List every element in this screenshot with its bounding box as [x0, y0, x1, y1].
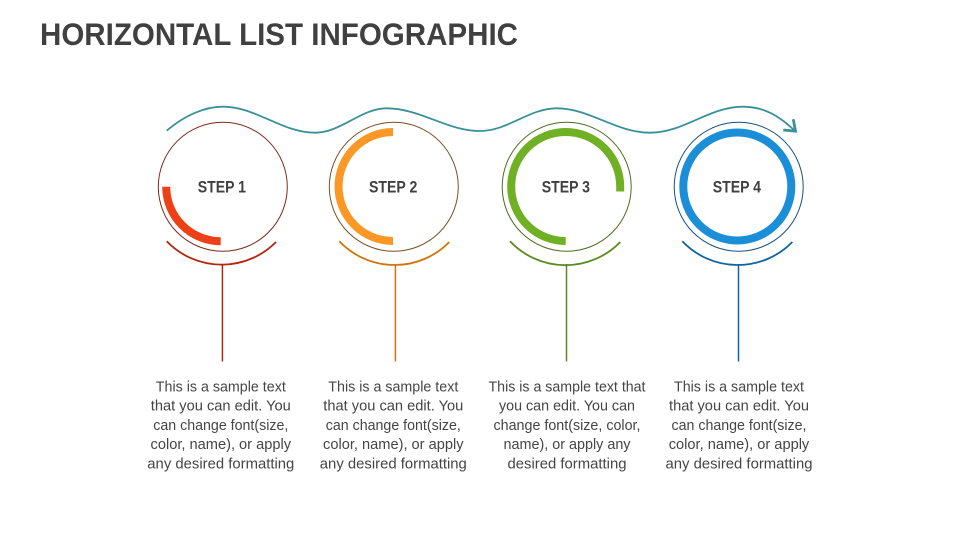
panel: step 4	[666, 122, 812, 472]
step 4 lower arc	[682, 241, 792, 265]
step 4 label: STEP 4	[713, 178, 761, 197]
step 2 text	[320, 380, 467, 472]
step 3 text: change font(size, color,	[494, 418, 640, 434]
step 3 text: desired formatting	[508, 456, 626, 472]
step 2 text: can change font(size,	[326, 418, 461, 434]
step 4 text: can change font(size,	[672, 418, 806, 434]
title: HORIZONTAL LIST INFOGRAPHIC	[40, 16, 518, 52]
step 3 lower arc	[510, 241, 620, 265]
step 1 text: This is a sample text	[156, 380, 286, 396]
icon: step 4 outer circle	[674, 122, 803, 251]
step 1 text	[147, 380, 294, 472]
step 1 text: can change font(size,	[153, 418, 288, 434]
step 3 text: name), or apply any	[504, 437, 631, 453]
step 3 text: This is a sample text that	[488, 380, 646, 396]
panel: step 3	[488, 122, 646, 472]
step 3 text	[488, 380, 646, 472]
panel: step 1	[147, 122, 294, 472]
step 2 text: that you can edit. You	[323, 398, 463, 414]
step 3 text: you can edit. You can	[499, 398, 635, 414]
step 1 stem	[221, 264, 223, 362]
panel: step 2	[320, 122, 467, 472]
icon: step 2 outer circle	[329, 122, 458, 251]
step 3 stem	[566, 264, 568, 362]
arrow: wavy connector	[167, 107, 795, 133]
step 2 stem	[394, 264, 396, 362]
icon: step 3 outer circle	[502, 122, 631, 251]
step 4 text: that you can edit. You	[669, 398, 809, 414]
icon: step 3 progress arc	[511, 132, 620, 241]
step 1 text: that you can edit. You	[151, 398, 291, 414]
step 4 text: This is a sample text	[674, 380, 804, 396]
step 4 text	[666, 380, 812, 472]
step 2 text: This is a sample text	[328, 380, 458, 396]
step 1 lower arc	[167, 241, 276, 265]
step 2 label: STEP 2	[369, 178, 417, 197]
step 1 text: any desired formatting	[147, 456, 294, 472]
step 1 text: color, name), or apply	[151, 437, 292, 453]
icon: step 1 progress arc	[166, 187, 221, 241]
step 1 label: STEP 1	[198, 178, 246, 197]
icon: step 2 progress arc	[339, 132, 393, 241]
icon: step 4 progress ring	[683, 132, 791, 240]
step 4 text: color, name), or apply	[669, 437, 810, 453]
step 2 lower arc	[339, 241, 449, 265]
step 4 text: any desired formatting	[666, 456, 812, 472]
step 2 text: any desired formatting	[320, 456, 467, 472]
step 4 stem	[738, 264, 740, 362]
icon: step 1 outer circle	[158, 122, 287, 251]
step 3 label: STEP 3	[542, 178, 590, 197]
step 2 text: color, name), or apply	[323, 437, 464, 453]
